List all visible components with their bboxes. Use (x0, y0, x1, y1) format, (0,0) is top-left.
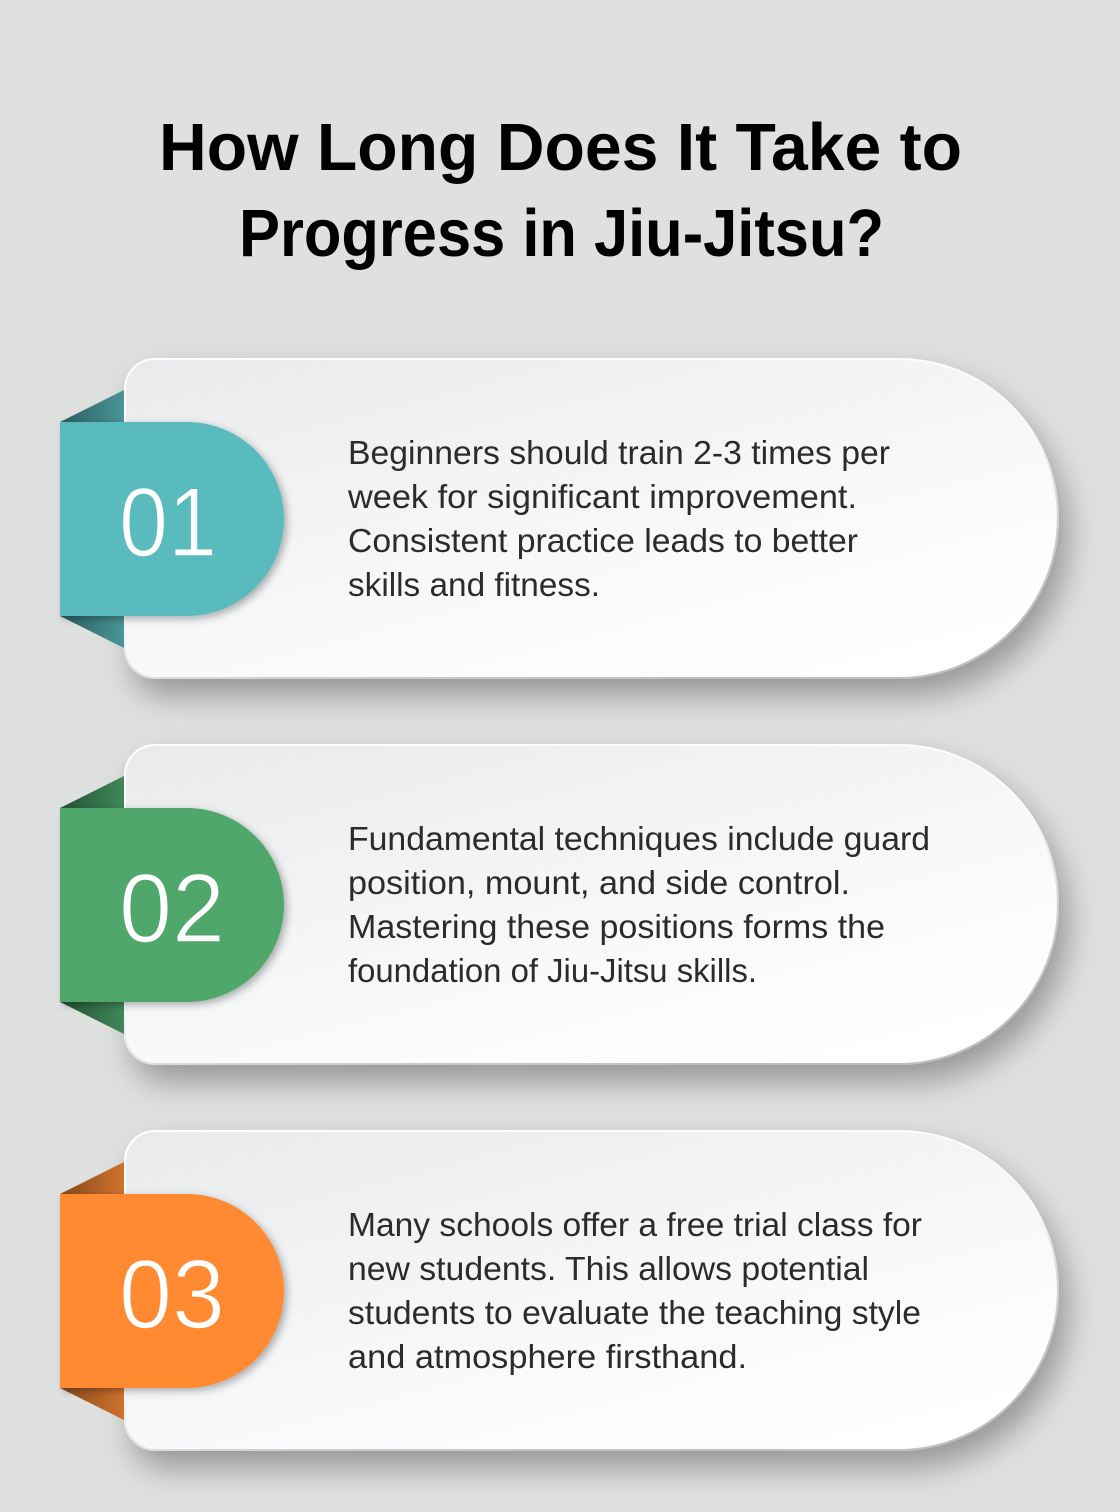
card 03 background (125, 1131, 1058, 1450)
text 01: skills and fitness. (348, 566, 600, 603)
upper fold 03 (60, 1162, 124, 1194)
panel: step 01 (60, 359, 1058, 678)
text 02 (348, 820, 930, 989)
text 02: foundation of Jiu-Jitsu skills. (348, 952, 757, 989)
upper fold 02 (60, 776, 124, 808)
number 03: 03 (119, 1239, 225, 1349)
lower fold 01 (60, 616, 124, 648)
title: How Long Does It Take to (159, 110, 962, 185)
text 03: new students. This allows potential (348, 1250, 869, 1287)
text 02: position, mount, and side control. (348, 864, 850, 901)
panel: step 02 (60, 745, 1058, 1064)
title: Progress in Jiu-Jitsu? (239, 196, 884, 271)
upper fold 01 (60, 390, 124, 422)
lower fold 03 (60, 1388, 124, 1420)
badge 03 (60, 1194, 284, 1388)
badge 02 (60, 808, 284, 1002)
text 02: Fundamental techniques include guard (348, 820, 930, 857)
badge 01 (60, 422, 284, 616)
text 03: students to evaluate the teaching style (348, 1294, 921, 1331)
number 01: 01 (119, 467, 217, 577)
text 01: Consistent practice leads to better (348, 522, 858, 559)
title (159, 110, 962, 271)
card 02 background (125, 745, 1058, 1064)
panel: step 03 (60, 1131, 1058, 1450)
card 01 background (125, 359, 1058, 678)
text 01: week for significant improvement. (347, 478, 857, 515)
text 01: Beginners should train 2-3 times per (348, 434, 890, 471)
text 01 (347, 434, 890, 603)
text 03 (348, 1206, 922, 1375)
text 02: Mastering these positions forms the (348, 908, 885, 945)
number 02: 02 (119, 853, 225, 963)
text 03: Many schools offer a free trial class for (348, 1206, 922, 1243)
text 03: and atmosphere firsthand. (348, 1338, 747, 1375)
lower fold 02 (60, 1002, 124, 1034)
